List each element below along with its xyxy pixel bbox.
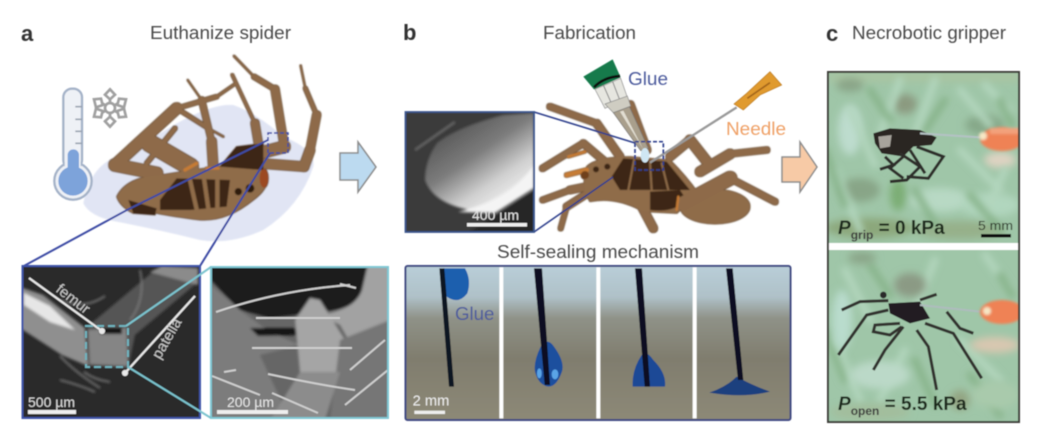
gripper spider closed xyxy=(873,128,980,182)
photo: grip state background xyxy=(825,72,1020,239)
label: P grip = 0 kPa: P xyxy=(838,218,851,239)
label: needle: Needle xyxy=(726,118,786,139)
illustration: spider with glue syringe and needle xyxy=(543,59,782,228)
label: glue: Glue xyxy=(628,68,668,89)
heading: necrobotic gripper: Necrobotic gripper xyxy=(852,22,1006,43)
label: glue: Glue xyxy=(455,303,494,324)
glue droplet xyxy=(641,148,649,163)
scale bar 200 um: 200 µm xyxy=(227,394,274,410)
gripper spider open xyxy=(838,292,982,390)
heading: euthanize spider: Euthanize spider xyxy=(150,22,291,43)
label: P open = 5.5 kPa: open xyxy=(851,404,879,418)
SEM image: femur and patella joint xyxy=(20,266,200,418)
dashed detail box xyxy=(86,326,128,367)
white divider between photos xyxy=(828,243,1019,250)
scale bar 2 mm: 2 mm xyxy=(413,394,449,410)
panel: self-sealing photo sequence xyxy=(405,266,791,420)
white frame dividers xyxy=(501,267,695,418)
frame 1: droplet above xyxy=(439,268,469,387)
frame 3: droplet spreading xyxy=(633,268,665,387)
arrow: blue xyxy=(340,142,376,192)
heading: self-sealing mechanism: Self-sealing mechanism xyxy=(497,241,699,262)
cold background blob xyxy=(83,105,314,241)
grass blades xyxy=(825,80,1012,415)
label: P grip = 0 kPa: grip xyxy=(851,228,873,242)
panel a label: a xyxy=(21,21,34,46)
icon: glue syringe xyxy=(583,59,648,151)
frame 2: droplet touching xyxy=(534,268,563,387)
arrow: peach xyxy=(782,142,817,192)
label: femur: femur xyxy=(53,281,93,318)
spider body and legs xyxy=(543,105,775,228)
inset connector lines (navy) xyxy=(534,112,635,232)
dashed detail box xyxy=(635,142,663,170)
label: P grip = 0 kPa: = 0 kPa xyxy=(873,218,945,239)
icon: snowflake xyxy=(94,89,126,127)
scale bar 5 mm: 5 mm xyxy=(978,218,1013,233)
illustration: euthanized spider xyxy=(54,56,317,241)
spider body and legs xyxy=(115,56,317,220)
scale bar 5 mm xyxy=(978,220,1013,238)
scale bar 400 um: 400 µm xyxy=(472,207,519,223)
label: P open = 5.5 kPa: P xyxy=(838,394,851,415)
callout lines: femur and patella measures xyxy=(29,278,195,375)
gripper hand and hub, top xyxy=(979,127,1024,151)
panel c label: c xyxy=(826,21,838,46)
scale bar 200 um xyxy=(217,394,288,414)
scale bar 500 um: 500 µm xyxy=(28,394,75,410)
panel b label: b xyxy=(403,20,416,45)
gripper hand and hub, bottom xyxy=(980,300,1024,324)
frame 4: sealed base xyxy=(709,268,770,395)
inset connector lines (cyan) xyxy=(126,267,211,418)
heading: fabrication: Fabrication xyxy=(543,22,636,43)
SEM image: glue-sealed tip xyxy=(405,112,534,232)
inset connector lines (blue) xyxy=(22,133,288,267)
photo: open state background xyxy=(830,252,1020,420)
icon: needle xyxy=(650,72,782,163)
icon: thermometer xyxy=(54,89,92,200)
label: P open = 5.5 kPa: = 5.5 kPa xyxy=(879,394,967,415)
label: patella: patella xyxy=(149,315,186,362)
SEM image: joint close-up xyxy=(211,262,390,420)
panel: necrobotic gripper photos xyxy=(825,72,1024,422)
